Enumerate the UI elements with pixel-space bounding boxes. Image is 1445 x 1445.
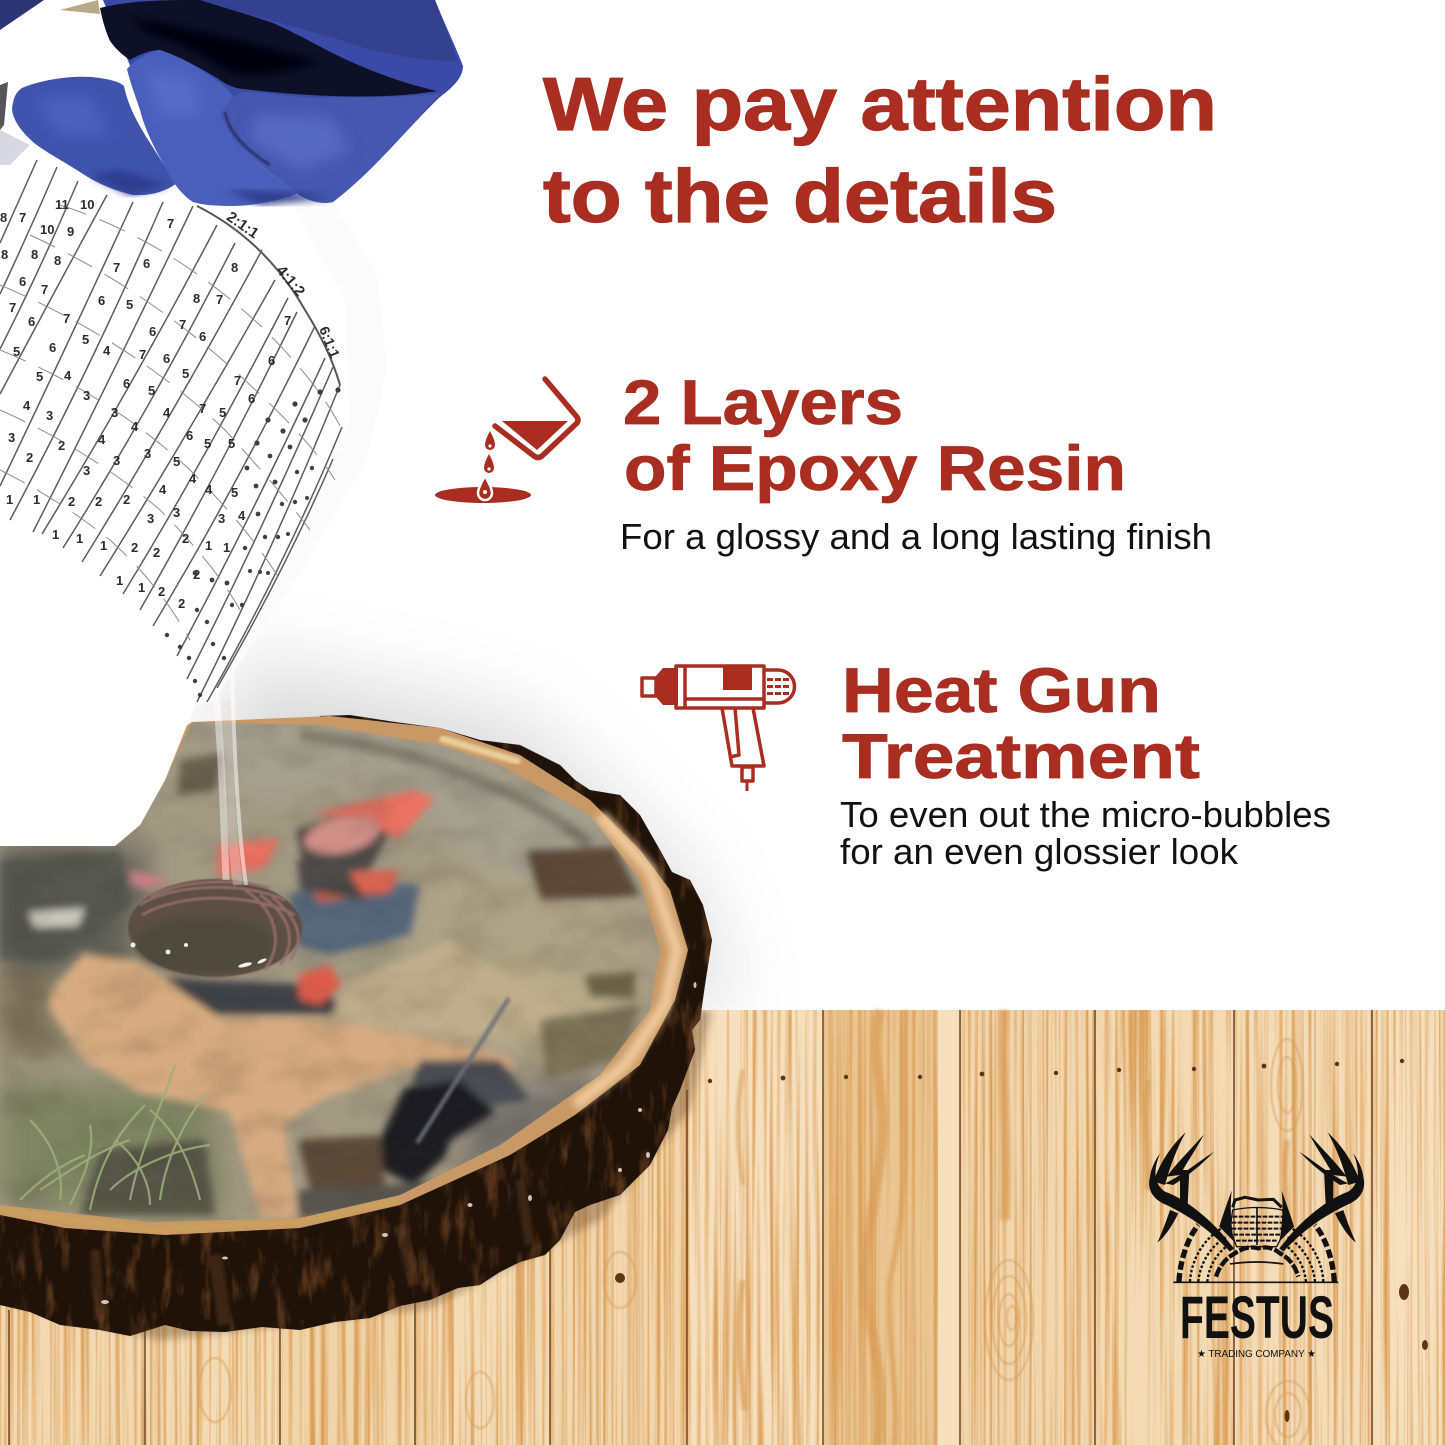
cup markings: 2 — [95, 494, 102, 509]
cup markings: 2 — [68, 494, 75, 509]
cup markings: 3 — [8, 430, 15, 445]
cup markings: 5 — [173, 454, 180, 469]
cup markings: 7 — [179, 317, 186, 332]
cup markings: 8 — [31, 247, 38, 262]
title: to the details — [543, 154, 1057, 238]
title — [543, 62, 1217, 238]
cup grid lines — [0, 160, 342, 702]
cup markings: 3 — [111, 405, 118, 420]
cup markings: 7 — [167, 216, 174, 231]
cup markings: 1 — [100, 538, 107, 553]
cup markings: 6 — [28, 314, 35, 329]
cup markings: 2 — [123, 492, 130, 507]
cup rim arc — [197, 206, 340, 385]
cup markings: 1 — [6, 492, 13, 507]
cup markings: 8 — [0, 210, 7, 225]
cup markings: 1 — [205, 538, 212, 553]
cup markings: 1 — [52, 527, 59, 542]
cup markings: 4 — [131, 419, 139, 434]
cup markings: 6 — [163, 351, 170, 366]
cup markings: 1 — [223, 540, 230, 555]
cup markings: 5 — [219, 405, 226, 420]
pouring resin stream — [216, 670, 246, 885]
cup markings: 3 — [147, 511, 154, 526]
small bark chip — [0, 825, 24, 843]
wood streaks and knots — [199, 1010, 1310, 1445]
cup markings: 1 — [116, 573, 123, 588]
cup markings: 7 — [9, 300, 16, 315]
heading: heat gun treatment: Heat Gun — [842, 656, 1161, 726]
cup markings: 8 — [231, 260, 238, 275]
cup markings: 5 — [13, 344, 20, 359]
cup markings: 6 — [49, 340, 56, 355]
wooden slab with printed photo — [0, 670, 712, 1336]
logo wordmark: FESTUS — [1180, 1284, 1334, 1351]
text: micro-bubbles description: for an even glossier look — [840, 831, 1239, 872]
cup markings: 5 — [126, 297, 133, 312]
cup markings: 4 — [103, 343, 111, 358]
cup markings: 4 — [189, 471, 197, 486]
cup markings: 2 — [193, 567, 200, 582]
title: We pay attention — [543, 62, 1217, 146]
cup markings: 4 — [98, 432, 106, 447]
heading: 2 layers of epoxy resin — [623, 368, 1126, 504]
heading: heat gun treatment — [842, 656, 1200, 792]
cup markings: 2 — [153, 545, 160, 560]
cup row ticks — [0, 205, 342, 640]
right antler — [1279, 1132, 1364, 1252]
cup small graduation dots — [165, 387, 341, 697]
cup markings: 7 — [199, 401, 206, 416]
cup markings: 3 — [144, 446, 151, 461]
cup markings: 10 — [40, 222, 54, 237]
cup markings: 4 — [64, 368, 72, 383]
bark edge — [0, 715, 712, 1336]
finger: ring — [220, 92, 440, 203]
cup markings: 5 — [228, 436, 235, 451]
cup markings: 3 — [46, 408, 53, 423]
cup markings: 6 — [19, 274, 26, 289]
cup markings: 2 — [26, 450, 33, 465]
cup markings: 7 — [63, 311, 70, 326]
measuring cup — [0, 130, 387, 846]
text: micro-bubbles description: To even out the micro-bubbles — [840, 794, 1331, 835]
cup markings: 4:1:2 — [273, 262, 308, 300]
cup markings: 6 — [248, 391, 255, 406]
cup markings: 3 — [83, 463, 90, 478]
cup markings: 4 — [238, 508, 246, 523]
dark palm gap — [100, 0, 437, 96]
cup markings: 7 — [41, 282, 48, 297]
cup markings: 4 — [205, 482, 213, 497]
cup markings: 1 — [138, 580, 145, 595]
blue gloved hand — [0, 0, 463, 206]
cup markings: 4 — [23, 398, 31, 413]
cup markings: 8 — [1, 247, 8, 262]
text: micro-bubbles description — [840, 794, 1331, 872]
cup markings: 2 — [178, 596, 185, 611]
cup markings: 8 — [193, 291, 200, 306]
cup markings: 6 — [123, 376, 130, 391]
paper corner — [0, 3, 125, 105]
cup markings: 8 — [54, 253, 61, 268]
cup markings: 6 — [149, 324, 156, 339]
cup markings: 5 — [82, 332, 89, 347]
cup markings: 7 — [216, 292, 223, 307]
cup markings: 7 — [139, 347, 146, 362]
back of hand — [103, 0, 463, 203]
photo under resin — [0, 722, 660, 1222]
cup markings: 2 — [131, 540, 138, 555]
lit bark streaks — [95, 1180, 530, 1325]
resin pool over the turkey — [128, 879, 302, 977]
cup markings: 6 — [98, 293, 105, 308]
cup markings: 7 — [113, 260, 120, 275]
cup markings: 10 — [80, 197, 94, 212]
tan rim of the slab — [0, 716, 688, 1235]
cup markings: 6 — [199, 329, 206, 344]
logo emblem: antlers and turkey fan — [1149, 1132, 1364, 1282]
cup markings: 6:1:1 — [316, 324, 343, 360]
cup markings: 1 — [76, 531, 83, 546]
cup markings: 7 — [19, 210, 26, 225]
cup markings: 3 — [173, 505, 180, 520]
cup markings: 3 — [113, 453, 120, 468]
icon: resin pouring cup — [435, 379, 578, 503]
cup markings: 2 — [58, 438, 65, 453]
cup markings: 11 — [55, 197, 69, 212]
cup markings: 9 — [67, 224, 74, 239]
cup markings: 3 — [83, 388, 90, 403]
slab shadow on the wood — [127, 1010, 715, 1344]
turkey fan — [1173, 1197, 1338, 1282]
icon: heat gun — [642, 666, 794, 791]
logo tagline: ★ TRADING COMPANY ★ — [1197, 1349, 1316, 1360]
left antler — [1149, 1132, 1234, 1252]
cup markings: 2 — [182, 531, 189, 546]
cup markings: 6 — [186, 428, 193, 443]
finger: thumb side — [12, 77, 177, 195]
wood plank floor — [0, 1010, 1445, 1445]
cup markings: 5 — [182, 366, 189, 381]
heading: 2 layers of epoxy resin: of Epoxy Resin — [624, 434, 1126, 504]
cup translucent rim — [0, 130, 387, 846]
cup markings: 2:1:1 — [223, 208, 262, 242]
cup markings: 5 — [204, 436, 211, 451]
cup markings — [0, 197, 343, 611]
cup markings: 5 — [148, 383, 155, 398]
finger: middle — [127, 50, 300, 206]
cup markings: 4 — [163, 405, 171, 420]
grass blades — [20, 1065, 210, 1210]
cup markings: 6 — [268, 353, 275, 368]
logo: Festus Trading Company — [1149, 1132, 1364, 1360]
cup markings: 4 — [159, 482, 167, 497]
slab shadow on the white wall — [200, 660, 730, 1010]
heading: 2 layers of epoxy resin: 2 Layers — [623, 368, 903, 438]
heading: heat gun treatment: Treatment — [842, 722, 1200, 792]
cup markings: 3 — [218, 511, 225, 526]
cup markings: 7 — [284, 313, 291, 328]
cup markings: 6 — [143, 256, 150, 271]
cup markings: 5 — [231, 485, 238, 500]
cup markings: 5 — [36, 369, 43, 384]
cup markings: 2 — [158, 584, 165, 599]
cup markings: 7 — [234, 373, 241, 388]
cup markings: 1 — [33, 492, 40, 507]
glossy resin highlights on bark — [101, 982, 696, 1304]
text: glossy finish description: For a glossy and a long lasting finish — [620, 516, 1212, 557]
